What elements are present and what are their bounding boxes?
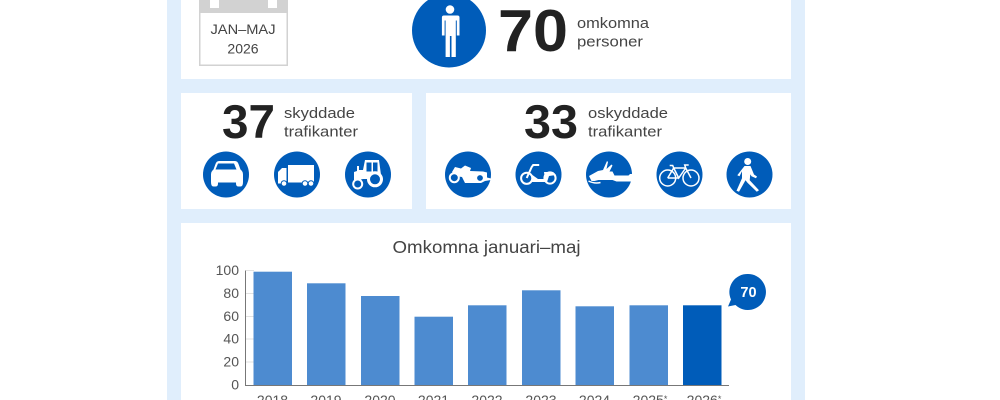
x axis labels [257, 392, 722, 400]
icon: calendar [199, 0, 288, 66]
icon: moped [516, 152, 562, 198]
protected number: 37 [222, 95, 275, 148]
y axis [216, 262, 254, 392]
y axis: 20 [223, 354, 239, 370]
icon: bicycle [656, 152, 702, 198]
callout: 70 [728, 274, 766, 310]
unprotected number: 33 [524, 95, 578, 148]
panel: unprotected road users [426, 93, 791, 209]
y axis: 40 [223, 330, 239, 346]
icon: car [203, 152, 249, 198]
total label: personer [577, 34, 643, 50]
icon: motorcycle [445, 152, 491, 198]
protected label [284, 105, 358, 140]
icon: tractor [345, 152, 391, 198]
x axis [245, 384, 729, 386]
y axis: 100 [216, 262, 239, 278]
total label: omkomna [577, 15, 650, 32]
protected label: skyddade [284, 105, 355, 122]
chart title: Omkomna januari–maj [392, 237, 580, 257]
panel: bar chart [181, 223, 791, 400]
y axis: 80 [223, 285, 239, 301]
total label [577, 15, 650, 50]
icon: calendar: 2026 [227, 40, 259, 56]
y axis: 60 [223, 308, 239, 324]
panel: total [181, 0, 791, 79]
y axis: 0 [231, 376, 239, 392]
unprotected label: oskyddade [588, 105, 668, 122]
icon: truck [274, 152, 320, 198]
icon: snowmobile [586, 152, 636, 198]
icon: pedestrian [726, 152, 772, 198]
unprotected label [588, 105, 668, 140]
unprotected label: trafikanter [588, 124, 662, 140]
panel: protected road users [181, 93, 412, 209]
callout: 70: 70 [740, 285, 757, 301]
bars [254, 272, 722, 385]
protected label: trafikanter [284, 124, 358, 140]
icon: person [412, 0, 486, 68]
icon: calendar: JAN–MAJ [210, 21, 276, 37]
